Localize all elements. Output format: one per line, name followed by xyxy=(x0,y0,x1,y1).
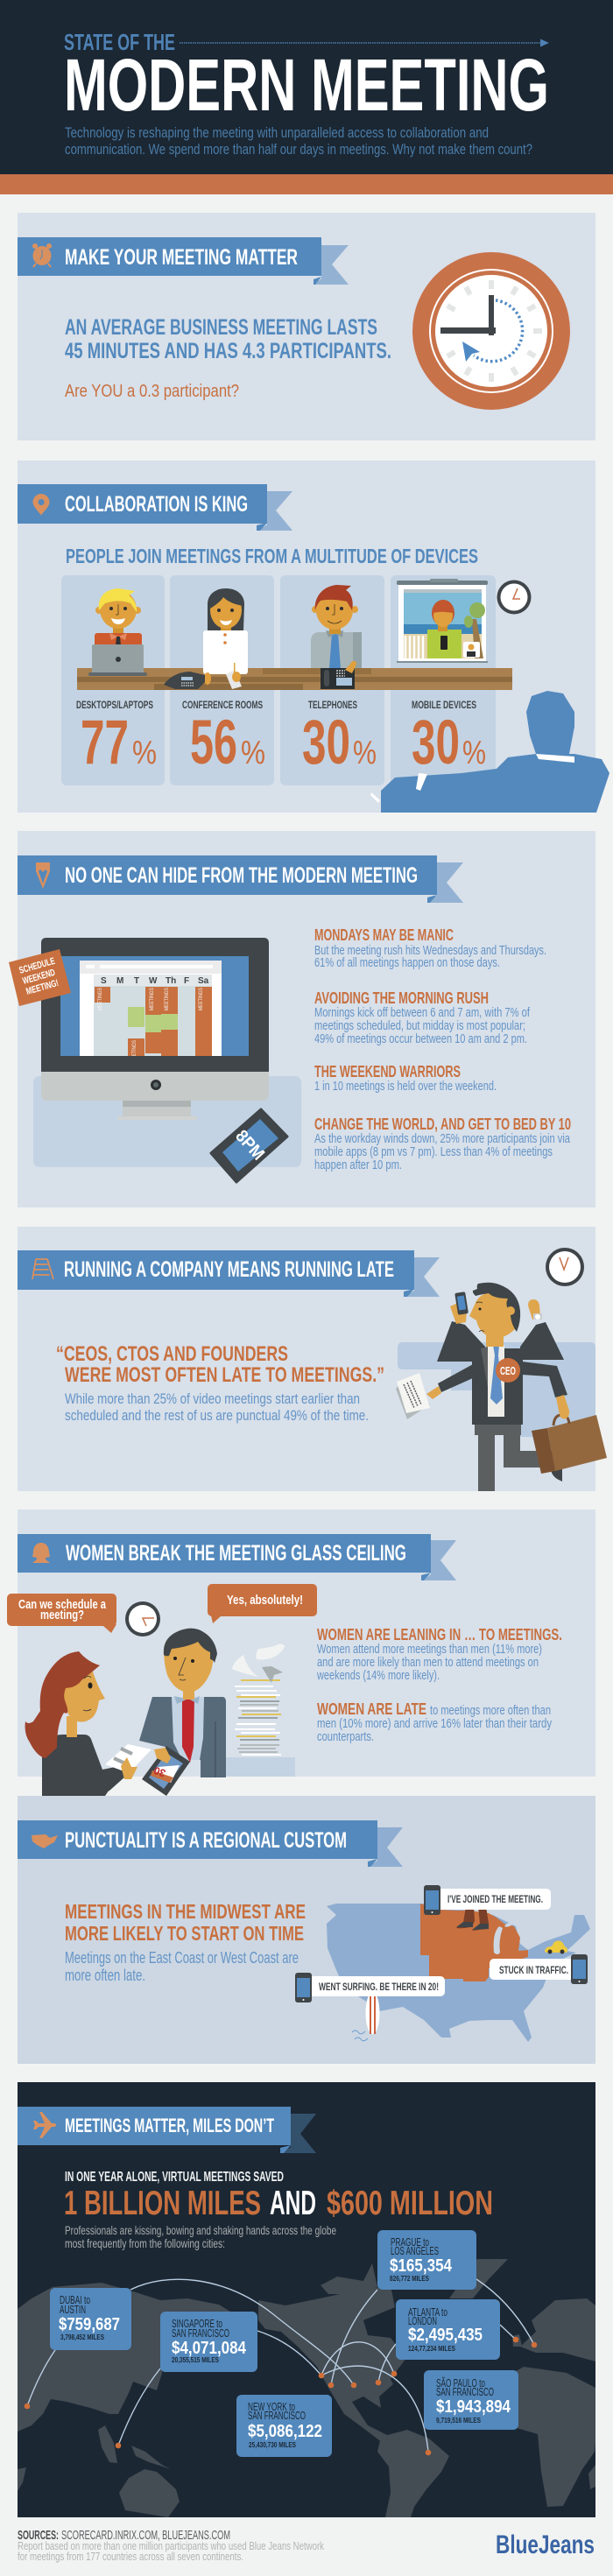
monitor with calendar: MEETINGS xyxy=(150,988,155,1010)
phone with 8PM: 8PM xyxy=(231,1127,268,1165)
route card: Atlanta: 124,77,234 MILES xyxy=(408,2345,456,2353)
device labels: TELEPHONES xyxy=(308,699,357,711)
footer: sources: for meetings from 177 countries across all seven continents. xyxy=(18,2550,243,2563)
route card: Atlanta: ATLANTA to xyxy=(408,2305,447,2319)
intro text xyxy=(65,124,532,158)
device percentages xyxy=(81,708,486,778)
text: morning rush: AVOIDING THE MORNING RUSH xyxy=(314,989,489,1007)
text: mondays: 61% of all meetings happen on those days. xyxy=(314,956,500,970)
badge: CEO xyxy=(496,1358,520,1383)
desk backdrop xyxy=(33,1076,301,1167)
route card: New York xyxy=(236,2395,332,2457)
route card: Sao Paulo: $1,943,894 xyxy=(436,2397,511,2417)
route card: Prague: 826,772 MILES xyxy=(390,2275,430,2283)
description: Professionals are kissing, bowing and shaking hands across the globe xyxy=(65,2223,336,2237)
banner: PUNCTUALITY IS A REGIONAL CUSTOM xyxy=(65,1828,347,1853)
route card: Dubai xyxy=(50,2288,131,2350)
callout: went surfing: WENT SURFING. BE THERE IN 20! xyxy=(319,1981,439,1993)
man with tablet xyxy=(139,1629,226,1796)
panel: meetings matter miles don't xyxy=(18,2082,595,2517)
description: most frequently from the following cities: xyxy=(65,2236,225,2250)
monitor with calendar: MEETINGS xyxy=(199,988,204,1010)
banner: WOMEN BREAK THE MEETING GLASS CEILING xyxy=(66,1541,406,1566)
banner: MEETINGS MATTER, MILES DON’T xyxy=(65,2115,274,2136)
banner xyxy=(18,1534,456,1580)
device labels: CONFERENCE ROOMS xyxy=(182,699,263,711)
banner xyxy=(18,855,463,903)
monitor with calendar: T xyxy=(134,976,139,986)
backdrop band xyxy=(398,1342,595,1437)
monitor with calendar: MEETINGS xyxy=(165,988,170,1010)
text: morning rush xyxy=(314,989,531,1046)
route card: Atlanta: $2,495,435 xyxy=(408,2326,483,2345)
text: morning rush: 49% of meetings occur between 10 am and 2 pm. xyxy=(314,1032,527,1046)
icon: wall clock xyxy=(497,580,531,615)
panel: make your meeting matter xyxy=(18,213,595,440)
header xyxy=(0,0,613,194)
banner: NO ONE CAN HIDE FROM THE MODERN MEETING xyxy=(65,863,418,888)
route card: Atlanta xyxy=(396,2299,500,2360)
text: mondays: MONDAYS MAY BE MANIC xyxy=(314,926,454,944)
headline text: AN AVERAGE BUSINESS MEETING LASTS xyxy=(65,315,377,340)
question text: Are YOU a 0.3 participant? xyxy=(65,382,239,401)
route card: Dubai: AUSTIN xyxy=(60,2303,86,2316)
phone with 8PM xyxy=(211,1109,287,1182)
icon: ladder xyxy=(32,1259,53,1279)
text: change the world xyxy=(314,1116,571,1172)
body text: Meetings on the East Coast or West Coast are xyxy=(65,1949,299,1967)
text: weekend warriors: 1 in 10 meetings is held over the weekend. xyxy=(314,1080,497,1094)
banner xyxy=(18,2107,316,2153)
world map xyxy=(18,2259,595,2517)
route card: Prague: PRAGUE to xyxy=(391,2235,429,2249)
device percentages: % xyxy=(462,735,486,771)
monitor with calendar: MEETINGS xyxy=(98,988,103,1010)
text: weekend warriors xyxy=(314,1063,497,1094)
desk xyxy=(226,1757,295,1777)
route card: Sao Paulo: SAN FRANCISCO xyxy=(436,2385,494,2398)
text: women late: men (10% more) and arrive 16% later than their tardy xyxy=(317,1717,553,1731)
text: women late xyxy=(317,1700,553,1744)
icon: alarm clock xyxy=(32,243,52,267)
route arcs xyxy=(27,2279,534,2452)
route card: Singapore xyxy=(160,2312,257,2372)
map: USA xyxy=(327,1904,590,2042)
icon: conference phone xyxy=(164,672,205,689)
panel: punctuality regional xyxy=(18,1796,595,2064)
device percentages: % xyxy=(353,735,377,771)
woman with papers xyxy=(25,1651,151,1796)
route card: Prague xyxy=(377,2230,476,2290)
text: leaning in: Women attend more meetings than men (11% more) xyxy=(317,1643,542,1657)
headline stat xyxy=(64,2185,493,2222)
device labels: DESKTOPS/LAPTOPS xyxy=(76,699,153,711)
banner: COLLABORATION IS KING xyxy=(65,492,248,517)
route card: Sao Paulo: SÃO PAULO to xyxy=(436,2376,485,2389)
arrow: dotted xyxy=(180,39,549,47)
callout: joined meeting xyxy=(424,1885,551,1915)
icon: airplane xyxy=(33,2112,56,2138)
device percentages: 77 xyxy=(81,708,129,778)
banner: RUNNING A COMPANY MEANS RUNNING LATE xyxy=(64,1257,394,1282)
heading xyxy=(65,1900,306,1945)
speech bubble: answer: Yes, absolutely! xyxy=(227,1594,303,1608)
route card: New York: $5,086,122 xyxy=(248,2422,322,2441)
text: women late: to meetings more often than xyxy=(430,1704,551,1718)
text: mondays xyxy=(314,926,546,970)
banner xyxy=(18,237,349,285)
route card: Dubai: 3,798,452 MILES xyxy=(60,2333,105,2341)
quote: WERE MOST OFTEN LATE TO MEETINGS.” xyxy=(65,1363,384,1387)
monitor with calendar: Sa xyxy=(198,976,209,986)
device percentages: 30 xyxy=(302,708,350,778)
panel: collaboration is king xyxy=(18,461,609,813)
body text xyxy=(65,1949,299,1984)
callout: went surfing xyxy=(295,1973,445,2002)
sticky note: SCHEDULE xyxy=(18,956,56,976)
text: change the world: happen after 10 pm. xyxy=(314,1158,402,1172)
headline text xyxy=(65,315,391,363)
monitor with calendar: W xyxy=(149,976,158,986)
route card: Dubai: $759,687 xyxy=(59,2315,120,2334)
route card: Singapore: SINGAPORE to xyxy=(172,2317,222,2330)
banner xyxy=(18,1250,440,1297)
text: women late: WOMEN ARE LATE xyxy=(317,1700,426,1718)
person: man with tie xyxy=(311,585,362,668)
description xyxy=(65,2223,336,2250)
route card: New York: 25,430,730 MILES xyxy=(249,2441,297,2449)
paper stack xyxy=(232,1643,285,1756)
route card: Singapore: 20,355,515 MILES xyxy=(172,2356,220,2364)
icon: woman bust xyxy=(32,1543,50,1563)
text: leaning in xyxy=(316,1626,562,1683)
route card: Prague: $165,354 xyxy=(390,2256,453,2276)
device percentages: 30 xyxy=(412,708,460,778)
route dots xyxy=(25,2337,537,2455)
sticky note: WEEKEND xyxy=(22,968,56,987)
body text xyxy=(65,1391,369,1424)
text: morning rush: meetings scheduled, but midday is most popular; xyxy=(314,1019,525,1033)
route card: Atlanta: LONDON xyxy=(408,2314,437,2327)
speech bubble: question xyxy=(7,1594,116,1633)
speech bubble: question: Can we schedule a xyxy=(18,1598,107,1612)
text: morning rush: Mornings kick off between 6 and 7 am, with 7% of xyxy=(314,1006,531,1020)
device percentages: 56 xyxy=(190,708,237,778)
body text: more often late. xyxy=(65,1967,145,1984)
person: man with laptop xyxy=(88,588,147,676)
monitor with calendar: M xyxy=(116,976,123,986)
banner xyxy=(18,1820,403,1867)
lead-in text: IN ONE YEAR ALONE, VIRTUAL MEETINGS SAVED xyxy=(65,2170,284,2185)
banner: MAKE YOUR MEETING MATTER xyxy=(65,245,298,270)
text: leaning in: and are more likely than men to attend meetings on xyxy=(317,1656,539,1670)
banner xyxy=(18,484,292,531)
sticky note xyxy=(9,949,71,1006)
monitor with calendar: Th xyxy=(166,976,176,986)
speech bubble: question: meeting? xyxy=(40,1608,84,1622)
device percentages: % xyxy=(241,735,265,771)
panel: women break the glass ceiling xyxy=(7,1510,595,1796)
text: women late: counterparts. xyxy=(317,1730,374,1744)
body text: scheduled and the rest of us are punctual 49% of the time. xyxy=(65,1408,369,1424)
figure: CEO with four arms xyxy=(396,1283,607,1491)
icon: wall clock xyxy=(546,1248,584,1286)
headline stat: $600 MILLION xyxy=(327,2185,493,2222)
body text: While more than 25% of video meetings start earlier than xyxy=(65,1391,360,1407)
footer: sources xyxy=(18,2528,324,2563)
route card: Singapore: SAN FRANCISCO xyxy=(172,2326,229,2340)
icon: surfboard xyxy=(352,1992,380,2041)
icon: big clock xyxy=(412,252,570,410)
text: leaning in: weekends (14% more likely). xyxy=(316,1669,440,1683)
headline text: 45 MINUTES AND HAS 4.3 PARTICIPANTS. xyxy=(65,339,391,363)
panel: running late xyxy=(18,1227,607,1491)
monitor with calendar xyxy=(41,938,269,1120)
badge: CEO: CEO xyxy=(500,1364,516,1377)
heading: MEETINGS IN THE MIDWEST ARE xyxy=(65,1900,306,1923)
route card: Prague: LOS ANGELES xyxy=(391,2244,439,2257)
callout: stuck in traffic: STUCK IN TRAFFIC. xyxy=(499,1964,568,1976)
intro text: Technology is reshaping the meeting with unparalleled access to collaboration and xyxy=(65,124,489,141)
heading: MORE LIKELY TO START ON TIME xyxy=(65,1922,304,1945)
icon: taxi xyxy=(545,1940,567,1954)
video screen xyxy=(397,579,488,663)
headline stat: AND xyxy=(270,2185,316,2222)
region: midwest xyxy=(420,1904,528,1981)
panel: no one can hide xyxy=(9,831,595,1207)
text: weekend warriors: THE WEEKEND WARRIORS xyxy=(314,1063,461,1080)
footer: sources: SOURCES: xyxy=(18,2528,59,2543)
route card: New York: NEW YORK to xyxy=(248,2400,295,2413)
monitor with calendar: S xyxy=(101,976,107,986)
icon: USA xyxy=(32,1834,58,1848)
table xyxy=(77,668,512,690)
quote xyxy=(56,1342,384,1387)
monitor with calendar: ETINGS xyxy=(132,1040,137,1056)
callout: joined meeting: I'VE JOINED THE MEETING. xyxy=(447,1893,543,1905)
route card: Sao Paulo xyxy=(424,2370,518,2430)
footer: sources: Report based on more than one million participants who used Blue Jeans Network xyxy=(18,2539,324,2552)
quote: “CEOS, CTOS AND FOUNDERS xyxy=(56,1342,288,1366)
person: woman in white xyxy=(203,588,248,689)
icon: cowboy boots xyxy=(456,1906,489,1931)
device labels: MOBILE DEVICES xyxy=(412,699,476,711)
sticky note: MEETING! xyxy=(25,978,60,997)
title: state of the: STATE OF THE xyxy=(64,29,175,55)
icon: pencil xyxy=(36,862,50,889)
icon: map pin xyxy=(33,494,49,515)
callout: stuck in traffic xyxy=(490,1954,588,1984)
man with tablet: 30 xyxy=(151,1764,167,1779)
device labels xyxy=(76,699,476,711)
headline stat: 1 BILLION MILES xyxy=(64,2185,261,2222)
monitor with calendar: F xyxy=(184,976,189,986)
route card: Singapore: $4,071,084 xyxy=(172,2339,247,2358)
silhouette: man watching xyxy=(370,691,609,813)
footer: sources: SCORECARD.INRIX.COM, BLUEJEANS.COM xyxy=(61,2528,230,2543)
device percentages: % xyxy=(132,735,157,771)
route card: New York: SAN FRANCISCO xyxy=(248,2409,306,2422)
icon: desk telephone xyxy=(321,661,356,689)
device cards xyxy=(61,575,496,785)
icon: wall clock xyxy=(125,1601,160,1636)
route card: Dubai: DUBAI to xyxy=(60,2293,90,2306)
route card: Sao Paulo: 9,719,516 MILES xyxy=(436,2417,482,2425)
speech bubble: answer xyxy=(208,1584,317,1623)
